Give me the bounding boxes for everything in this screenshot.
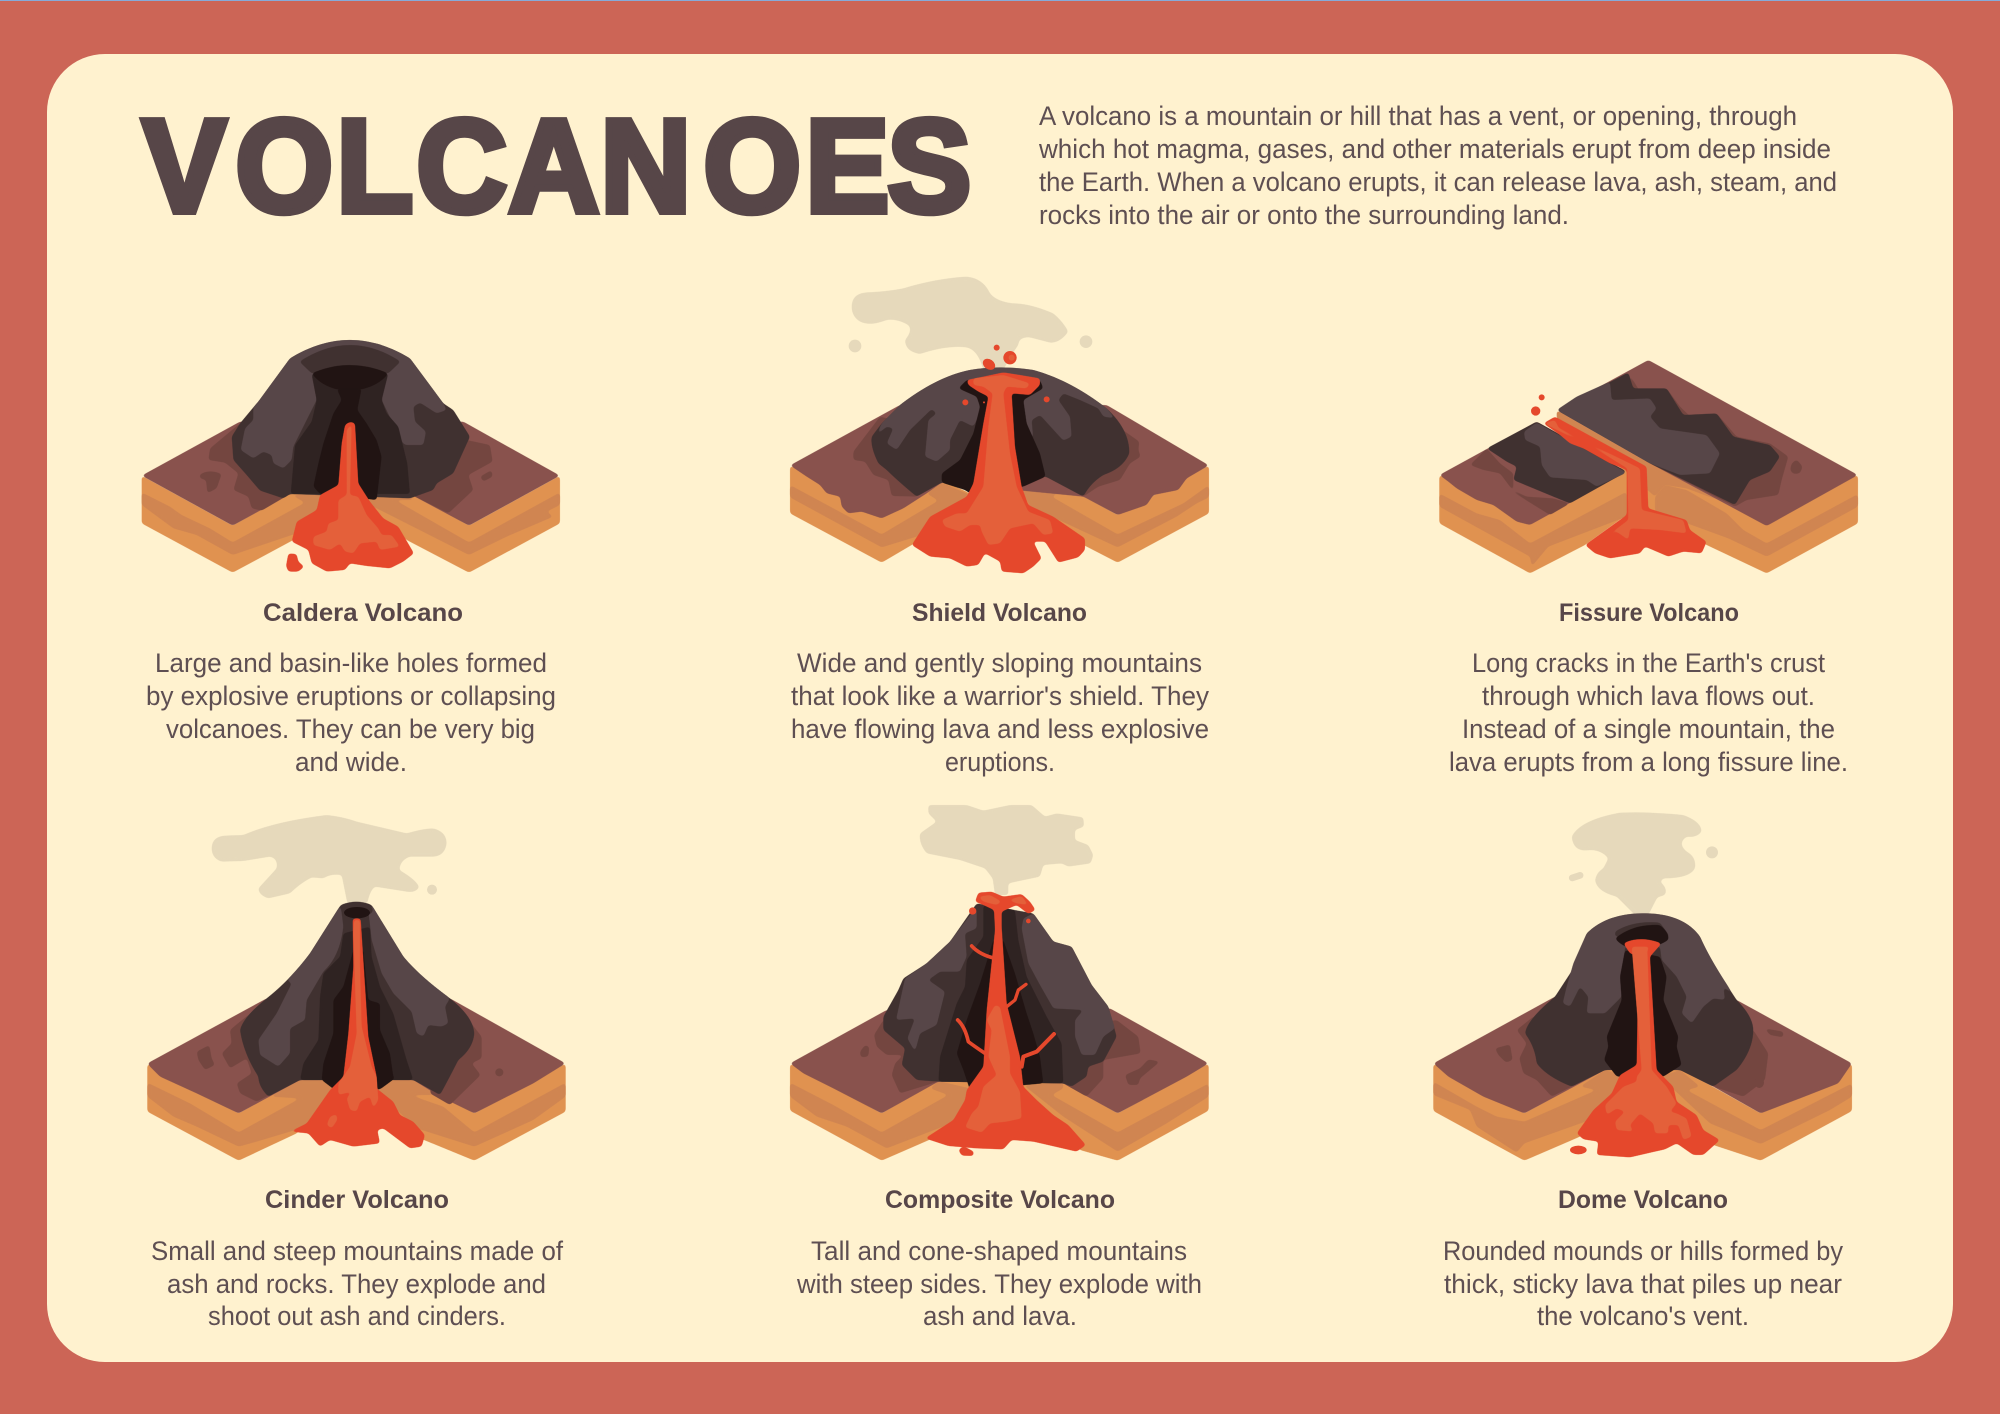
description: composite volcano: with steep sides. They explode with (796, 1269, 1202, 1299)
description: composite volcano: Tall and cone-shaped mountains (811, 1236, 1187, 1266)
illustration: shield volcano (790, 277, 1209, 573)
description: shield volcano: Wide and gently sloping mountains (797, 648, 1202, 678)
description: fissure volcano: Long cracks in the Earth's crust (1472, 648, 1826, 678)
panel: dome volcano (1433, 812, 1852, 1331)
description: dome volcano: thick, sticky lava that piles up near (1444, 1269, 1842, 1299)
description: caldera volcano: and wide. (295, 747, 407, 777)
heading: composite volcano: Composite Volcano (885, 1186, 1115, 1214)
description: composite volcano: ash and lava. (923, 1301, 1077, 1331)
heading: dome volcano: Dome Volcano (1558, 1186, 1728, 1214)
description: cinder volcano (151, 1236, 564, 1331)
heading: caldera volcano: Caldera Volcano (263, 599, 463, 627)
intro text block: the Earth. When a volcano erupts, it can release lava, ash, steam, and (1039, 167, 1837, 197)
description: caldera volcano: volcanoes. They can be very big (166, 714, 535, 744)
title: VOLCANOES (143, 93, 971, 240)
description: dome volcano: the volcano's vent. (1537, 1301, 1749, 1331)
illustration: composite volcano (790, 805, 1209, 1161)
illustration: cinder volcano (147, 815, 566, 1161)
description: fissure volcano: through which lava flows out. (1482, 681, 1815, 711)
panel: composite volcano (790, 805, 1209, 1331)
heading: cinder volcano: Cinder Volcano (265, 1186, 449, 1214)
lava branches (958, 946, 1054, 1067)
intro text block (1038, 101, 1837, 230)
panel: caldera volcano (142, 340, 560, 777)
heading: shield volcano: Shield Volcano (912, 599, 1087, 627)
description: shield volcano: have flowing lava and less explosive (791, 714, 1209, 744)
description: shield volcano (791, 648, 1210, 777)
panel: fissure volcano (1439, 360, 1858, 777)
description: dome volcano (1443, 1236, 1844, 1331)
illustration: dome volcano (1433, 812, 1852, 1161)
smoke (212, 815, 447, 903)
intro text block: rocks into the air or onto the surrounding land. (1039, 200, 1569, 230)
panel: shield volcano (790, 277, 1210, 777)
description: caldera volcano: by explosive eruptions or collapsing (146, 681, 556, 711)
description: cinder volcano: Small and steep mountains made of (151, 1236, 564, 1266)
description: caldera volcano: Large and basin-like holes formed (155, 648, 547, 678)
description: cinder volcano: ash and rocks. They explode and (167, 1269, 546, 1299)
illustration: caldera volcano (142, 340, 560, 573)
description: shield volcano: that look like a warrior's shield. They (791, 681, 1210, 711)
description: fissure volcano: Instead of a single mountain, the (1462, 714, 1835, 744)
panel: cinder volcano (147, 815, 566, 1331)
description: shield volcano: eruptions. (945, 747, 1055, 777)
intro text block: A volcano is a mountain or hill that has a vent, or opening, through (1039, 101, 1797, 131)
description: fissure volcano (1449, 648, 1848, 777)
smoke (852, 277, 1068, 370)
description: caldera volcano (146, 648, 556, 777)
smoke (920, 805, 1093, 895)
smoke (1572, 812, 1702, 915)
description: composite volcano (796, 1236, 1202, 1331)
description: fissure volcano: lava erupts from a long fissure line. (1449, 747, 1848, 777)
intro text block: which hot magma, gases, and other materials erupt from deep inside (1038, 134, 1831, 164)
description: dome volcano: Rounded mounds or hills formed by (1443, 1236, 1844, 1266)
description: cinder volcano: shoot out ash and cinders. (208, 1301, 506, 1331)
heading: fissure volcano: Fissure Volcano (1559, 599, 1739, 627)
illustration: fissure volcano (1439, 360, 1858, 573)
